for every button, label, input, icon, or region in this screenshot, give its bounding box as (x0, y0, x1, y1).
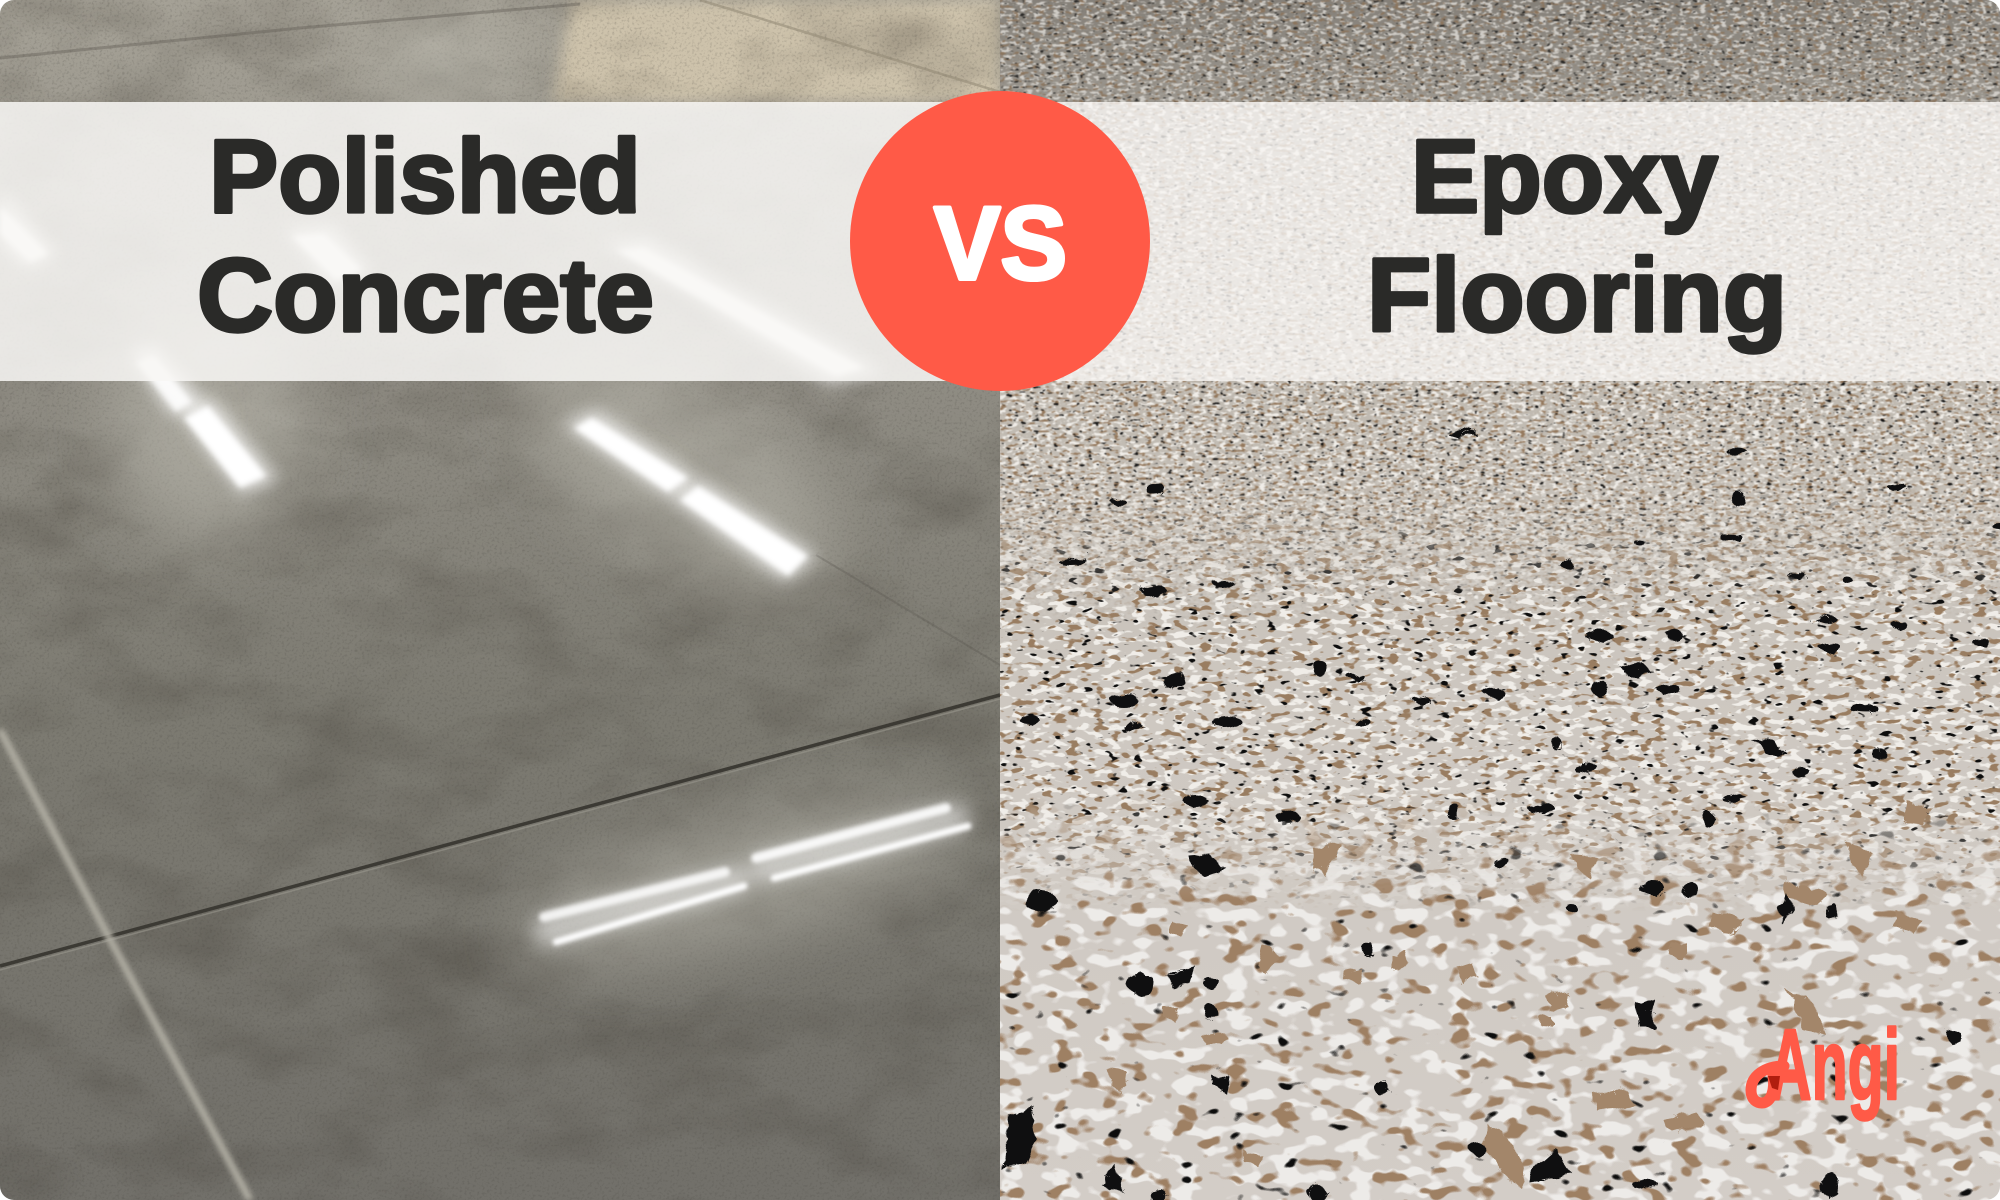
heading: Epoxy Flooring: Flooring (1367, 238, 1787, 354)
heading: Epoxy Flooring (1367, 119, 1787, 354)
badge: VS circle (850, 91, 1150, 391)
panel: epoxy flooring photo (1000, 0, 2000, 1200)
heading: Polished Concrete: Concrete (197, 238, 654, 354)
heading: Polished Concrete: Polished (209, 119, 641, 235)
large black chips (1000, 428, 2000, 1198)
banner: right translucent white (1000, 102, 2000, 381)
reflection streak glows (0, 190, 885, 582)
beige far wall area (552, 0, 1000, 102)
banner: left translucent white (0, 102, 1000, 381)
logo: Angi (1751, 1009, 1900, 1121)
reflection streak cores (0, 206, 864, 576)
panel: polished concrete photo (0, 0, 1000, 1200)
large tan chips (1104, 798, 1932, 1185)
floor joints (0, 0, 1000, 1200)
large near flakes (1000, 760, 2000, 1200)
small distant flakes (1000, 0, 2000, 618)
logo: Angi: Angi (1769, 1009, 1900, 1121)
badge: VS circle: VS (934, 186, 1067, 302)
heading: Polished Concrete (197, 119, 654, 354)
dark top band (1000, 0, 2000, 102)
light haze around reflections (110, 10, 978, 997)
floor-level light bars (544, 808, 968, 942)
heading: Epoxy Flooring: Epoxy (1411, 119, 1718, 235)
medium flakes (1000, 484, 2000, 908)
